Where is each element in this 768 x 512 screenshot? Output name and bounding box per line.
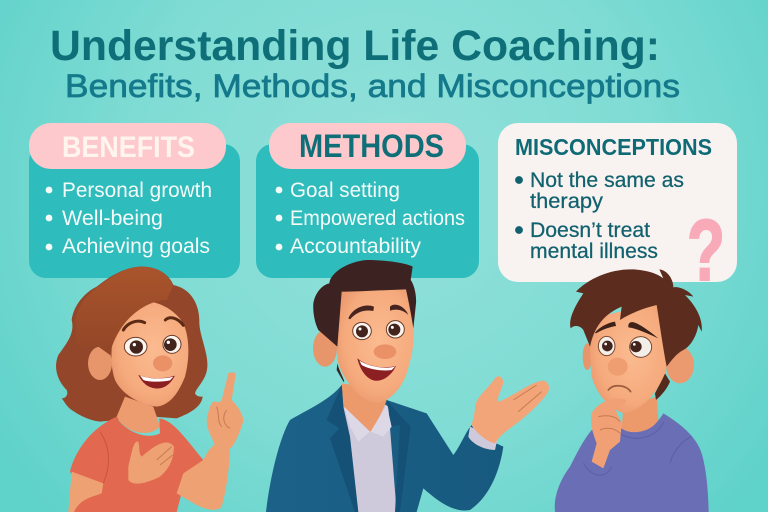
- panel: misconceptions: [498, 123, 737, 299]
- benefits list: Well-being: [62, 206, 163, 230]
- methods heading: [269, 123, 466, 169]
- misconceptions list: Doesn’t treat: [530, 218, 650, 242]
- title: [50, 22, 680, 104]
- misconceptions heading: MISCONCEPTIONS: [515, 134, 712, 160]
- character: boy: [555, 269, 709, 512]
- misconceptions list: therapy: [530, 189, 603, 213]
- benefits list: Personal growth: [62, 178, 212, 202]
- methods list: Empowered actions: [290, 206, 465, 230]
- character: woman: [56, 267, 243, 512]
- misconceptions list: Not the same as: [530, 168, 684, 192]
- benefits heading: BENEFITS: [62, 131, 195, 164]
- benefits list: [46, 178, 212, 258]
- title: Understanding Life Coaching:: [50, 22, 660, 70]
- title: Benefits, Methods, and Misconceptions: [65, 68, 680, 104]
- misconceptions list: [515, 168, 684, 263]
- misconceptions list: mental illness: [530, 239, 658, 263]
- benefits heading: [29, 123, 226, 169]
- panel: benefits: [29, 123, 240, 278]
- methods heading: METHODS: [299, 128, 444, 164]
- icon: question mark: ?: [687, 203, 725, 299]
- character: man: [266, 260, 549, 512]
- methods list: Goal setting: [290, 178, 400, 202]
- panel: methods: [256, 123, 479, 278]
- methods list: Accountability: [290, 234, 421, 258]
- methods list: [276, 178, 465, 258]
- benefits list: Achieving goals: [62, 234, 210, 258]
